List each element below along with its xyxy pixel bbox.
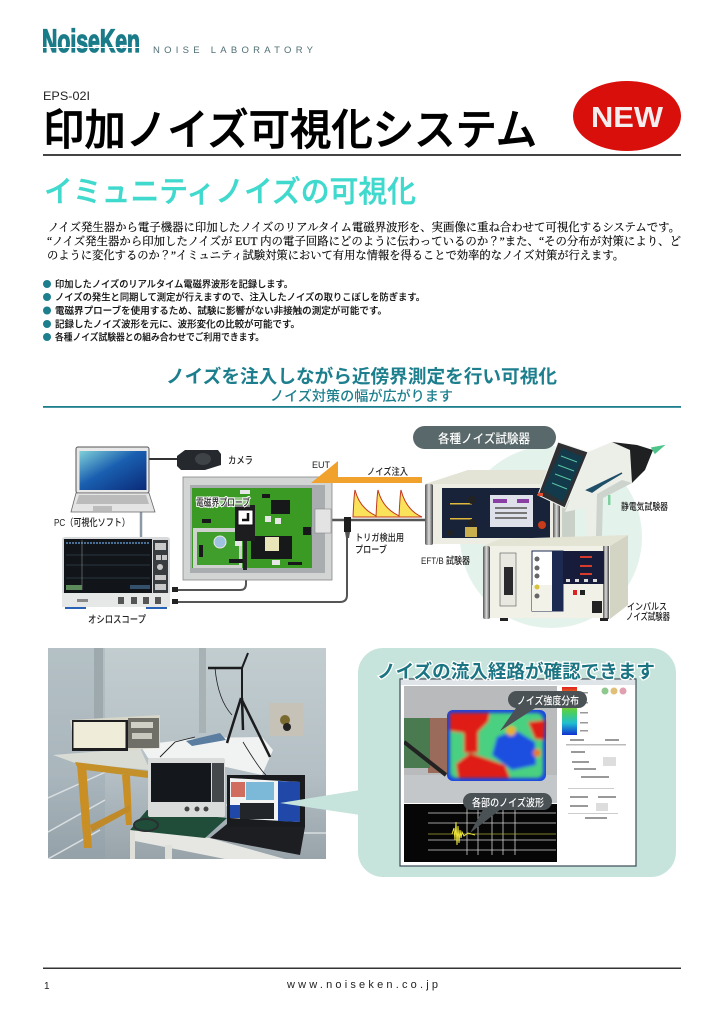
section heading xyxy=(166,366,557,404)
label: EUT: EUT xyxy=(312,460,330,471)
feature list: 印加したノイズのリアルタイム電磁界波形を記録します。 xyxy=(55,278,293,290)
laptop in photo xyxy=(210,775,305,855)
lower table xyxy=(130,829,285,859)
icon: laptop PC xyxy=(71,447,155,512)
label: field probe xyxy=(196,496,250,509)
tripod with antenna xyxy=(160,653,270,775)
intro paragraph xyxy=(47,220,681,262)
noise waveform panel xyxy=(404,804,557,862)
circuit board on foam xyxy=(186,733,226,746)
label: oscilloscope: オシロスコープ xyxy=(88,614,146,626)
pill: noise intensity distribution: ノイズ強度分布 xyxy=(517,694,579,707)
feature list: 電磁界プローブを使用するため、試験に影響がない非接触の測定が可能です。 xyxy=(55,305,387,317)
probe xyxy=(235,505,255,570)
icon: oscilloscope xyxy=(62,537,178,609)
callout panel: noise inflow path xyxy=(280,648,676,877)
intro paragraph: “ノイズ発生器から印加したノイズが EUT 内の電子回路にどのように伝わっているのか？”また、“その分布が対策により、ど xyxy=(47,234,681,248)
logo: NoiseKen xyxy=(42,23,140,59)
label: PC: PC（可視化ソフト） xyxy=(54,516,130,529)
background circle: noise testers xyxy=(460,446,642,628)
EUT enclosure with circuit board xyxy=(183,477,332,580)
intro paragraph: のように変化するのか？”イミュニティ試験対策において有用な情報を得ることで効率的なノイズ対策が行えます。 xyxy=(47,248,624,262)
device: EFT/B tester xyxy=(425,470,590,545)
system diagram xyxy=(54,426,670,628)
cables xyxy=(141,459,425,602)
label: impulse noise tester: インパルス xyxy=(627,602,667,613)
pill: noise waveform at each point xyxy=(463,793,552,833)
noise intensity heatmap xyxy=(404,686,557,803)
oscilloscope in photo xyxy=(148,758,225,817)
label: impulse noise tester xyxy=(626,602,670,623)
section heading: ノイズ対策の幅が広がります xyxy=(270,388,453,404)
pill: noise intensity distribution xyxy=(500,691,587,731)
logo xyxy=(41,23,314,59)
label: trigger probe xyxy=(355,532,404,556)
intro paragraph: ノイズ発生器から電子機器に印加したノイズのリアルタイム電磁界波形を、実画像に重ね合わせて可視化するシステムです。 xyxy=(48,220,680,234)
feature list: ノイズの発生と同期して測定が行えますので、注入したノイズの取りこぼしを防ぎます。 xyxy=(55,292,425,304)
photo: test setup xyxy=(48,640,326,860)
instrument xyxy=(70,715,160,751)
icon: camera xyxy=(177,450,221,470)
label: EFT/B tester: EFT/B 試験器 xyxy=(421,555,470,567)
badge: NEW xyxy=(573,81,681,151)
logo: NOISE LABORATORY xyxy=(153,45,314,56)
white foam xyxy=(140,737,273,775)
table xyxy=(53,748,150,770)
trigger probe clamp xyxy=(344,517,351,538)
badge: NEW: NEW xyxy=(591,102,664,134)
pill: noise testers: 各種ノイズ試験器 xyxy=(438,431,530,446)
wall plate xyxy=(269,703,303,736)
model number: EPS-02I xyxy=(43,89,90,103)
label: trigger probe: トリガ検出用 xyxy=(355,532,404,544)
callout heading: ノイズの流入経路が確認できます xyxy=(377,661,655,682)
label: field probe: 電磁界プローブ xyxy=(196,496,250,509)
section heading: ノイズを注入しながら近傍界測定を行い可視化 xyxy=(166,366,557,387)
color scale xyxy=(562,687,577,735)
label: camera: カメラ xyxy=(228,455,253,467)
noise pulse waveform xyxy=(353,490,422,517)
page number: 1 xyxy=(44,981,50,992)
title: 印加ノイズ可視化システム xyxy=(43,107,537,155)
arrow: noise injection xyxy=(311,461,422,483)
subtitle: イミュニティノイズの可視化 xyxy=(44,176,416,209)
device: impulse noise tester xyxy=(483,535,628,621)
label: impulse noise tester: ノイズ試験器 xyxy=(626,611,670,623)
label: ESD tester: 静電気試験器 xyxy=(621,501,668,513)
device: ESD gun xyxy=(538,442,663,536)
label: trigger probe: プローブ xyxy=(355,544,387,556)
website: www.noiseken.co.jp xyxy=(286,979,438,991)
pill: noise waveform at each point: 各部のノイズ波形 xyxy=(472,796,544,809)
feature list xyxy=(43,278,425,344)
feature list: 各種ノイズ試験器との組み合わせでご利用できます。 xyxy=(55,332,264,344)
pill: noise testers xyxy=(413,426,556,449)
settings panel xyxy=(566,688,626,819)
callout wedge xyxy=(280,790,360,815)
label: noise injection: ノイズ注入 xyxy=(367,466,408,478)
feature list: 記録したノイズ波形を元に、波形変化の比較が可能です。 xyxy=(55,318,300,330)
software window xyxy=(400,679,636,866)
